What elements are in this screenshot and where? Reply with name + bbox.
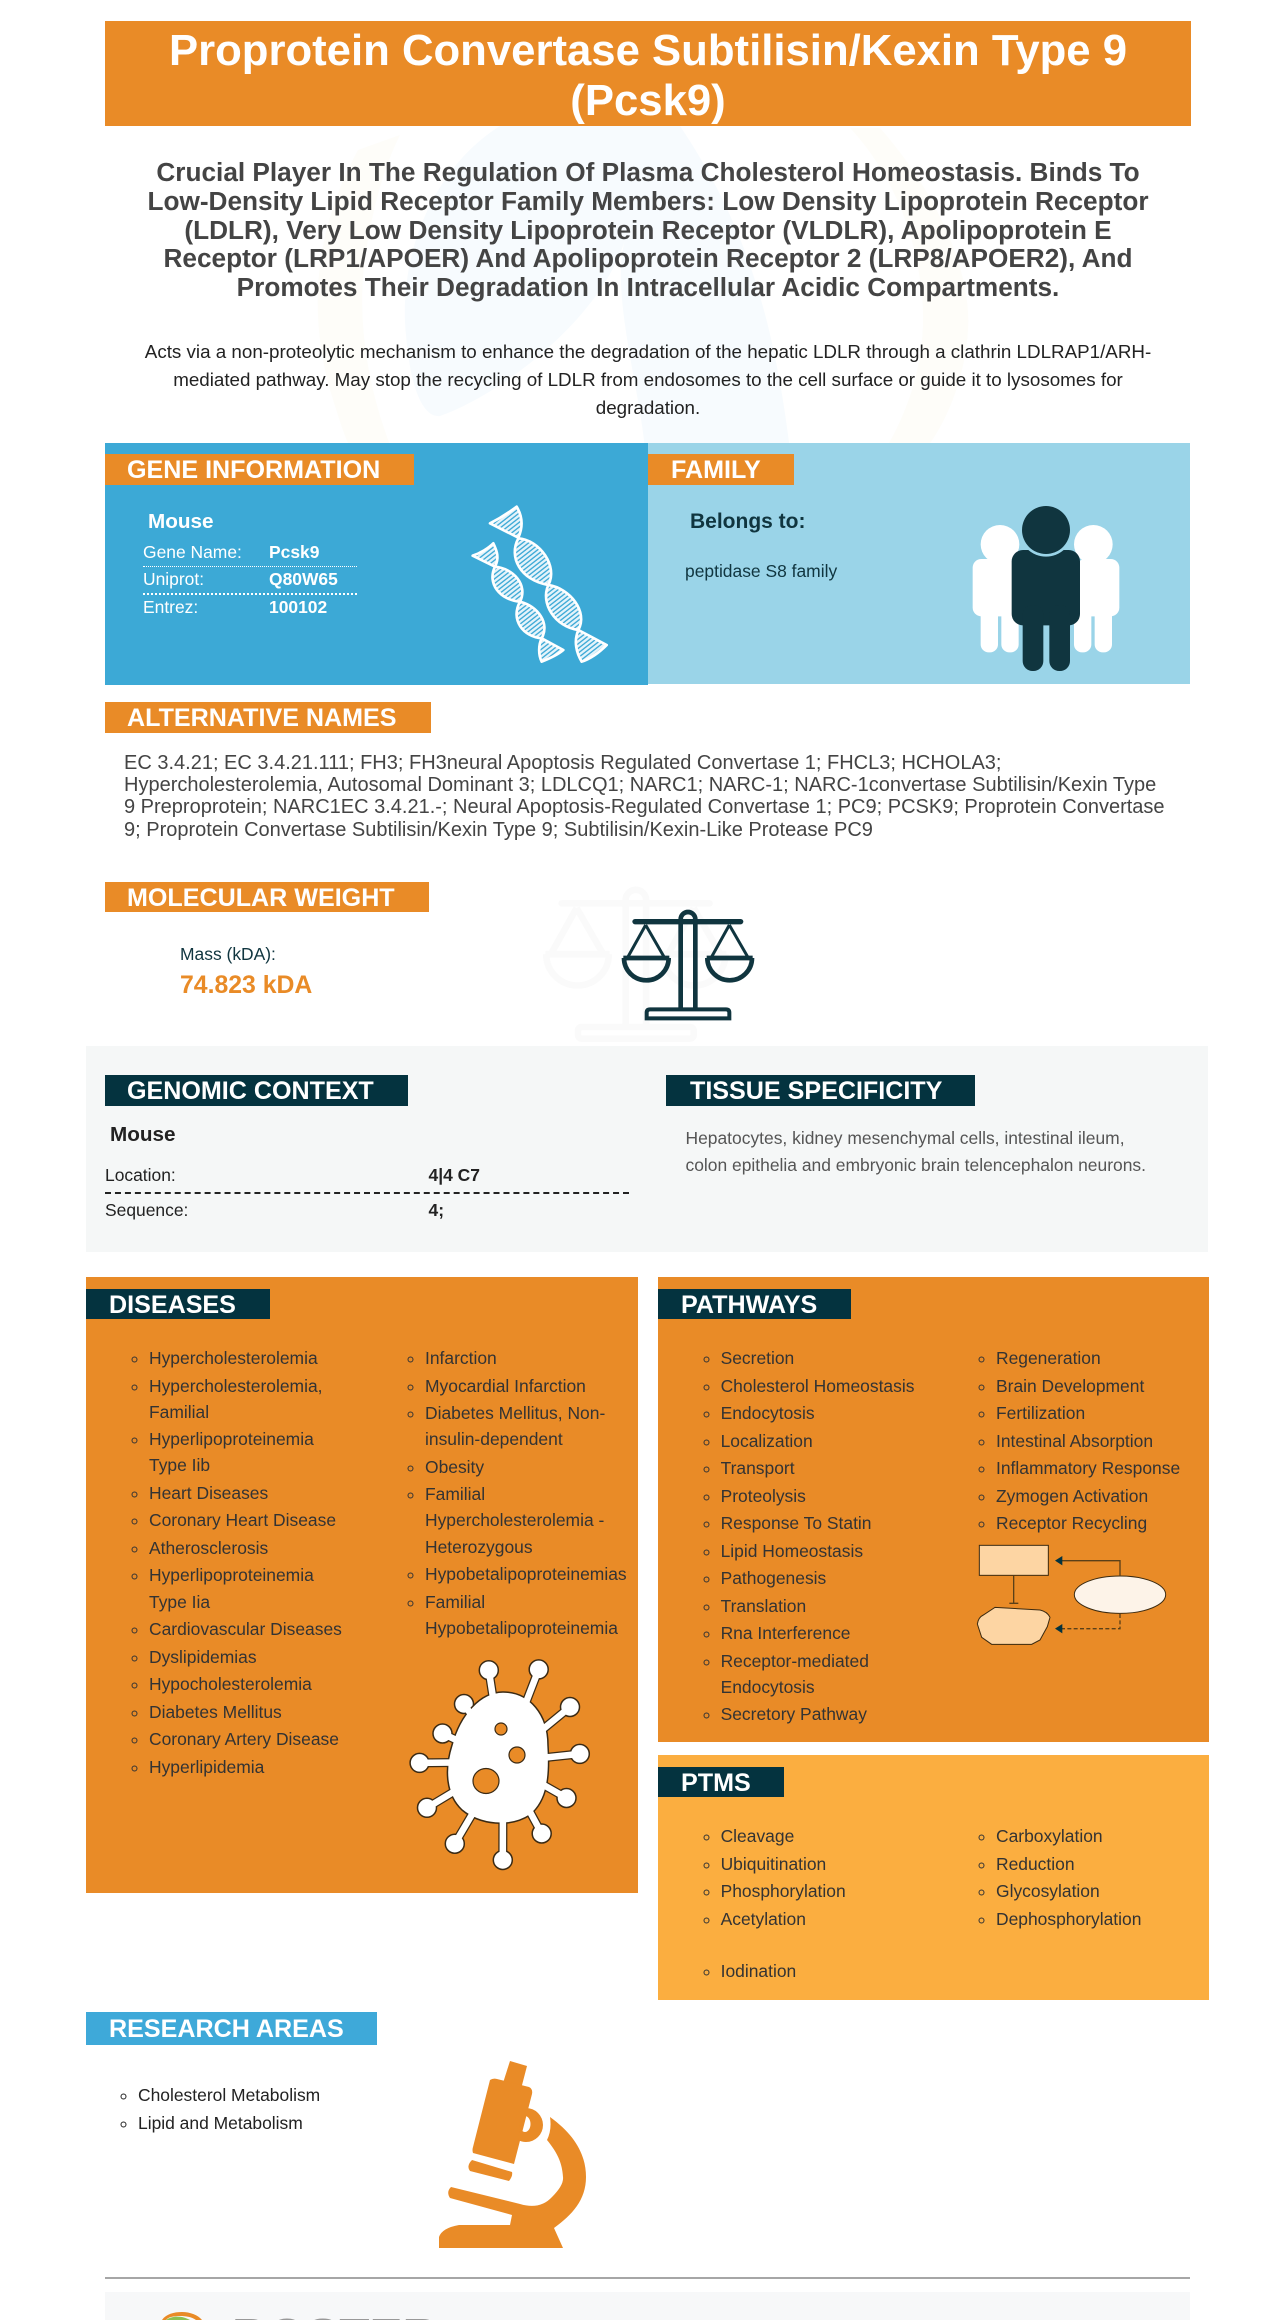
panel: pathways [658,1277,1209,1742]
entrez row: 100102 [269,597,327,617]
pathways list column 2: Zymogen Activation [996,1486,1148,1506]
description: Acts via a non-proteolytic mechanism to enhance the degradation of the hepatic LDLR through a clathrin LDLRAP1/ARH- [145,341,1151,362]
diseases list column 1: Hypocholesterolemia [149,1674,312,1694]
pathways list column 1 [704,1348,914,1724]
icon: people [972,506,1120,671]
icon: dna [471,505,608,663]
diseases list column 2: Hypercholesterolemia - [425,1510,604,1530]
diseases list column 1: Hyperlipoproteinemia [149,1565,314,1585]
pathways list column 1: Translation [721,1596,806,1616]
uniprot row: Uniprot: [143,569,204,589]
mass value: 74.823 kDA [180,972,312,999]
location row: 4|4 C7 [428,1165,480,1185]
ptms list column 2: Dephosphorylation [996,1908,1141,1928]
icon: ghost scales [530,880,770,1050]
heading: diseases: DISEASES [109,1291,236,1319]
panel: genomic context and tissue specificity: 4; [428,1200,444,1220]
pathways list column 1: Pathogenesis [721,1568,826,1588]
pathways list column 2 [978,1348,1180,1533]
heading: gene information: GENE INFORMATION [127,456,380,484]
panel: diseases [86,1277,638,1893]
icon: logo [162,2312,202,2320]
diseases list column 1: Atherosclerosis [149,1538,268,1558]
heading: tissue specificity: TISSUE SPECIFICITY [690,1077,942,1105]
panel: genomic context and tissue specificity [86,1046,1208,1252]
ptms list extra: Iodination [721,1961,796,1981]
diseases list column 2: Diabetes Mellitus, Non- [425,1403,605,1423]
ptms list column 1: Cleavage [721,1826,794,1846]
pathways list column 1: Endocytosis [721,1677,815,1697]
diseases list column 1: Coronary Artery Disease [149,1729,339,1749]
sequence row [105,1200,444,1220]
entrez row: Entrez: [143,597,198,617]
pathways list column 1: Secretory Pathway [721,1704,867,1724]
tissue text: colon epithelia and embryonic brain telencephalon neurons. [686,1155,1146,1175]
subtitle: Receptor (LRP1/APOER) And Apolipoprotein Receptor 2 (LRP8/APOER2), And [163,243,1132,273]
ptms list column 1: Ubiquitination [721,1854,826,1874]
heading: pathways: PATHWAYS [681,1291,817,1319]
subtitle: Crucial Player In The Regulation Of Plasma Cholesterol Homeostasis. Binds To [156,157,1140,187]
pathways list column 2: Inflammatory Response [996,1458,1180,1478]
gene name row: Pcsk9 [269,542,319,562]
mass label: Mass (kDA): [180,944,276,964]
pathways list column 1: Cholesterol Homeostasis [721,1376,914,1396]
pathways list column 2: Regeneration [996,1348,1101,1368]
alternative names text: Hypercholesterolemia, Autosomal Dominant 3; LDLCQ1; NARC1; NARC-1; NARC-1convertase Subtilisin/Kexin Type [124,774,1156,796]
diseases list column 1: Diabetes Mellitus [149,1702,282,1722]
heading: ptms [658,1767,784,1797]
pathways list column 1: Rna Interference [721,1623,850,1643]
diseases list column 1: Type Iib [149,1455,210,1475]
ptms list column 1: Acetylation [721,1908,806,1928]
ptms list column 2: Carboxylation [996,1826,1103,1846]
diseases list column 2: insulin-dependent [425,1429,563,1449]
pathways list column 1: Receptor-mediated [721,1650,869,1670]
ptms list column 1 [704,1826,846,1928]
pathways list column 2: Brain Development [996,1376,1144,1396]
diseases list column 2: Myocardial Infarction [425,1376,586,1396]
ptms list column 2 [978,1826,1141,1928]
uniprot row [143,566,357,595]
subtitle: (LDLR), Very Low Density Lipoprotein Receptor (VLDLR), Apolipoprotein E [184,215,1112,245]
diseases list column 1: Familial [149,1402,209,1422]
alternative names text: EC 3.4.21; EC 3.4.21.111; FH3; FH3neural Apoptosis Regulated Convertase 1; FHCL3; HCHOLA3; [124,752,1002,774]
pathways list column 2: Intestinal Absorption [996,1430,1153,1450]
pathways list column 1: Secretion [721,1348,794,1368]
icon: virus [409,1659,590,1870]
diseases list column 1: Hyperlipoproteinemia [149,1429,314,1449]
species: Mouse [110,1123,176,1146]
panel: family [648,443,1190,684]
subtitle: Low-Density Lipid Receptor Family Members: Low Density Lipoprotein Receptor [147,186,1149,216]
diseases list column 2: Hypobetalipoproteinemias [425,1564,627,1584]
diseases list column 2: Heterozygous [425,1537,533,1557]
pathways list column 1: Localization [721,1430,813,1450]
pathways list column 1: Lipid Homeostasis [721,1540,863,1560]
tissue text: Hepatocytes, kidney mesenchymal cells, intestinal ileum, [686,1128,1125,1148]
title: (Pcsk9) [570,76,726,124]
description: mediated pathway. May stop the recycling of LDLR from endosomes to the cell surface or guide it to lysosomes for [173,369,1123,390]
icon: scales [622,910,754,1020]
alternative names text [124,752,1165,841]
subtitle: Promotes Their Degradation In Intracellular Acidic Compartments. [237,272,1059,302]
alternative names text: 9; Proprotein Convertase Subtilisin/Kexin Type 9; Subtilisin/Kexin-Like Protease PC9 [124,819,873,841]
title [105,21,1191,126]
diseases list column 1 [132,1348,342,1777]
description [144,341,1151,418]
icon: microscope [439,2061,586,2248]
heading: family [648,454,794,485]
heading: pathways [658,1289,851,1319]
divider line [105,2277,1190,2279]
diseases list column 1: Hyperlipidemia [149,1757,264,1777]
heading: research areas [86,2012,377,2045]
diseases list column 2 [408,1348,627,1638]
uniprot row: Q80W65 [269,569,338,589]
species: Mouse [148,510,214,533]
diseases list column 2: Obesity [425,1457,484,1477]
heading: molecular weight: MOLECULAR WEIGHT [127,884,395,912]
panel: ptms [658,1755,1209,2000]
belongs to label: Belongs to: [690,510,806,533]
diseases list column 1: Dyslipidemias [149,1647,257,1667]
ptms list column 2: Reduction [996,1854,1075,1874]
diseases list column 1: Hypercholesterolemia, [149,1376,322,1396]
subtitle [147,157,1149,302]
family value: peptidase S8 family [685,561,837,581]
background watermark [300,120,990,450]
heading: diseases [86,1289,270,1319]
heading: research areas: RESEARCH AREAS [109,2015,344,2043]
footer panel [105,2292,1190,2320]
pathways list column 2: Fertilization [996,1403,1085,1423]
heading: ptms: PTMS [681,1769,751,1797]
entrez row [143,597,327,617]
panel: gene information [105,443,648,685]
diseases list column 1: Type Iia [149,1592,210,1612]
diseases list column 2: Familial [425,1484,485,1504]
ptms list column 2: Glycosylation [996,1881,1100,1901]
diseases list column 2: Infarction [425,1348,497,1368]
title: Proprotein Convertase Subtilisin/Kexin Type 9 [169,26,1127,75]
heading: family: FAMILY [671,456,761,484]
heading: genomic context: GENOMIC CONTEXT [127,1077,374,1105]
diseases list column 1: Coronary Heart Disease [149,1510,336,1530]
research areas list: Lipid and Metabolism [138,2113,303,2133]
sequence row: Sequence: [105,1200,188,1220]
pathways list column 2: Receptor Recycling [996,1513,1147,1533]
tissue text [686,1128,1146,1175]
pathways list column 1: Transport [721,1458,795,1478]
location row [105,1162,629,1194]
diseases list column 1: Cardiovascular Diseases [149,1619,342,1639]
research areas list [120,2085,320,2133]
gene name row: Gene Name: [143,542,242,562]
heading: alternative names: ALTERNATIVE NAMES [127,704,397,732]
icon: pathway diagram [976,1544,1166,1645]
alternative names text: 9 Preproprotein; NARC1EC 3.4.21.-; Neural Apoptosis-Regulated Convertase 1; PC9; PCSK9; Proprotein Convertase [124,796,1165,818]
pathways list column 1: Response To Statin [721,1513,872,1533]
description: degradation. [596,397,700,418]
diseases list column 1: Heart Diseases [149,1483,268,1503]
diseases list column 2: Hypobetalipoproteinemia [425,1618,618,1638]
pathways list column 1: Proteolysis [721,1486,806,1506]
pathways list column 1: Endocytosis [721,1403,815,1423]
diseases list column 2: Familial [425,1592,485,1612]
diseases list column 1: Hypercholesterolemia [149,1348,318,1368]
ptms list column 1: Phosphorylation [721,1881,846,1901]
gene name row [143,539,357,567]
location row: Location: [105,1165,176,1185]
research areas list: Cholesterol Metabolism [138,2085,320,2105]
